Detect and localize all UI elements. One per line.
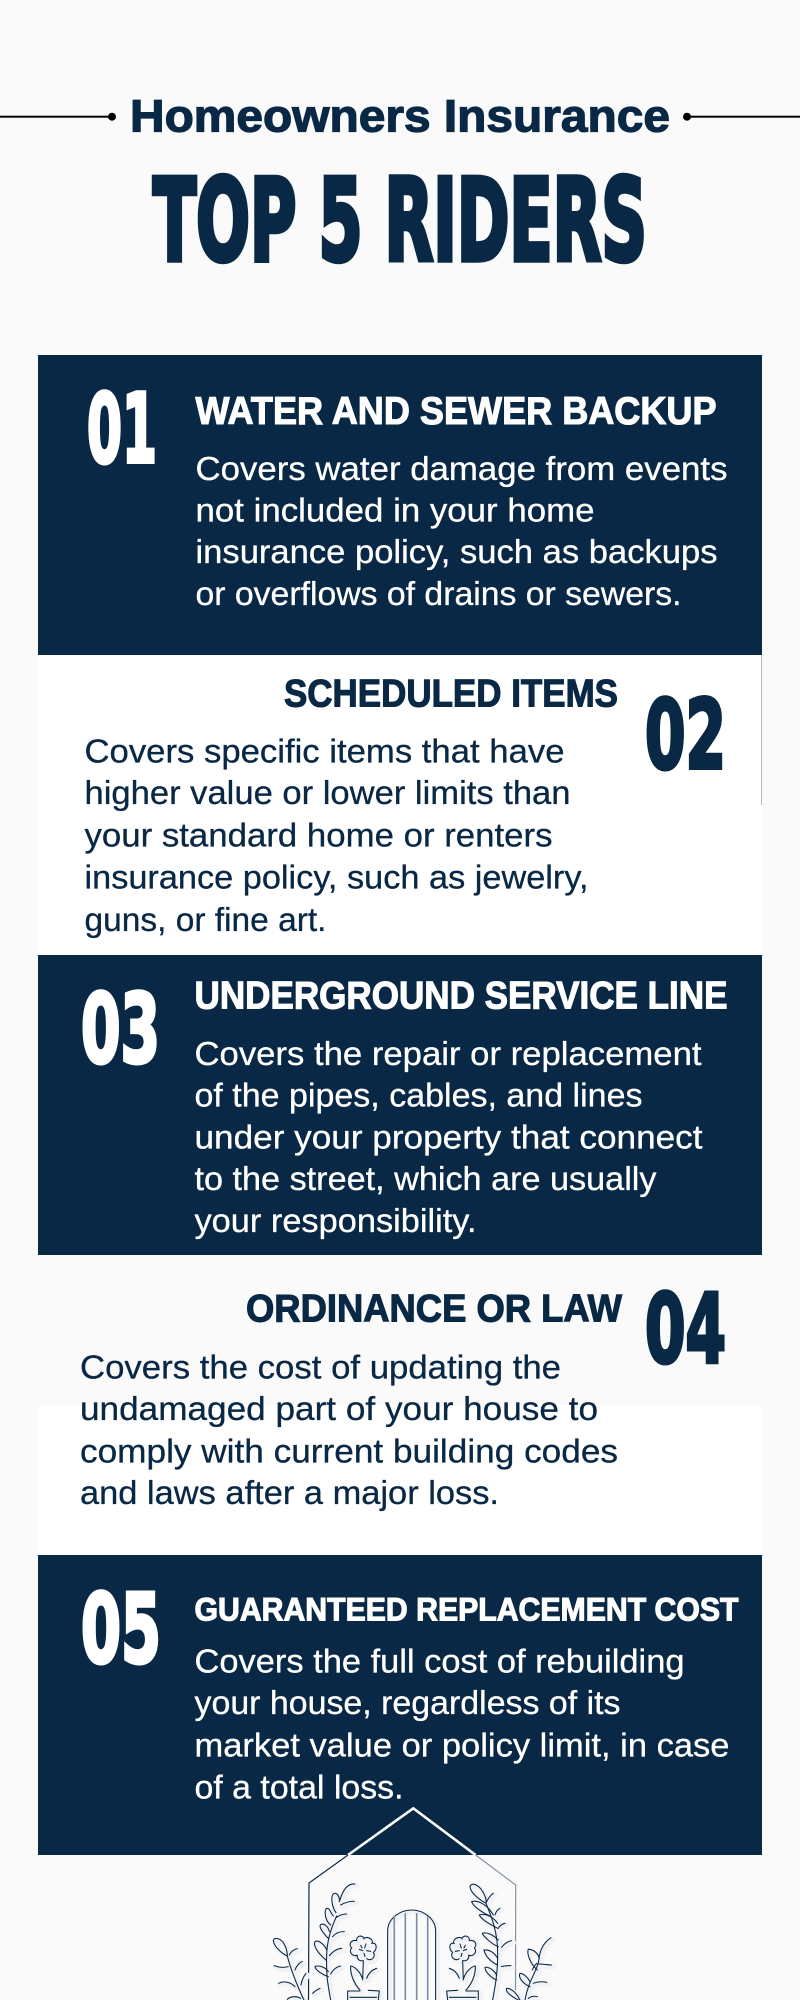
panel: 05 guaranteed replacement cost [38, 1555, 762, 1855]
panel background [38, 1555, 762, 1855]
description: or overflows of drains or sewers. [196, 575, 682, 612]
heading: GUARANTEED REPLACEMENT COST [194, 1592, 739, 1628]
description: of the pipes, cables, and lines [194, 1077, 642, 1114]
panel background [38, 655, 762, 955]
description: under your property that connect [194, 1119, 702, 1156]
heading: WATER AND SEWER BACKUP [196, 390, 716, 433]
plant: left outer [273, 1938, 320, 2000]
panel: 03 underground service line [38, 955, 762, 1255]
description: your responsibility. [194, 1202, 476, 1239]
description: comply with current building codes [80, 1433, 618, 1470]
plant: right outer [506, 1938, 552, 2000]
description: market value or policy limit, in case [194, 1727, 730, 1764]
description: guns, or fine art. [84, 901, 326, 938]
description: your house, regardless of its [194, 1684, 620, 1721]
door planks [394, 1913, 428, 2000]
description [194, 1035, 702, 1239]
number 01: 01 [87, 375, 157, 485]
panel background [38, 955, 762, 1255]
number 02: 02 [645, 681, 726, 791]
heading: UNDERGROUND SERVICE LINE [194, 974, 728, 1018]
description: higher value or lower limits than [84, 774, 570, 811]
description: Covers the cost of updating the [80, 1349, 561, 1386]
description [194, 1643, 730, 1806]
right roof and wall [476, 1855, 516, 2000]
panel background [38, 1405, 762, 1555]
description: of a total loss. [194, 1769, 404, 1806]
plant shadow [275, 1886, 554, 2000]
door arch [388, 1910, 436, 2000]
description: insurance policy, such as jewelry, [84, 859, 588, 896]
description: Covers the full cost of rebuilding [194, 1643, 684, 1680]
description: not included in your home [196, 492, 594, 529]
description: your standard home or renters [84, 817, 552, 854]
number 05: 05 [81, 1575, 161, 1685]
description: and laws after a major loss. [80, 1474, 499, 1511]
description: Covers water damage from events [196, 450, 728, 487]
description: Covers the repair or replacement [194, 1035, 702, 1072]
panel: 04 ordinance or law [38, 1275, 762, 1555]
panel: 01 water and sewer backup [38, 355, 762, 655]
description: insurance policy, such as backups [196, 533, 718, 570]
plants and door line art [273, 1884, 552, 2000]
potted flower: right [447, 1936, 478, 2000]
panel background [38, 355, 762, 655]
number 03: 03 [81, 975, 160, 1085]
panel: 02 scheduled items [38, 655, 762, 955]
description [80, 1349, 618, 1511]
header [0, 90, 800, 287]
subtitle: Homeowners Insurance [130, 90, 670, 142]
heading: SCHEDULED ITEMS [284, 673, 618, 716]
left roof and wall [308, 1855, 348, 2000]
heading: ORDINANCE OR LAW [246, 1288, 623, 1331]
description [84, 733, 588, 938]
left rule with dot [0, 113, 116, 121]
plant: right tall [470, 1884, 512, 2000]
description [196, 450, 728, 612]
illustration: house with plants and door [273, 1808, 554, 2000]
description: undamaged part of your house to [80, 1390, 598, 1427]
potted flower: left [348, 1936, 379, 2000]
description: Covers specific items that have [84, 733, 564, 770]
number 04: 04 [645, 1275, 726, 1385]
plant: left tall [315, 1884, 355, 2000]
description: to the street, which are usually [194, 1160, 657, 1197]
roof on dark panel [348, 1808, 476, 1855]
right rule with dot [683, 113, 800, 121]
